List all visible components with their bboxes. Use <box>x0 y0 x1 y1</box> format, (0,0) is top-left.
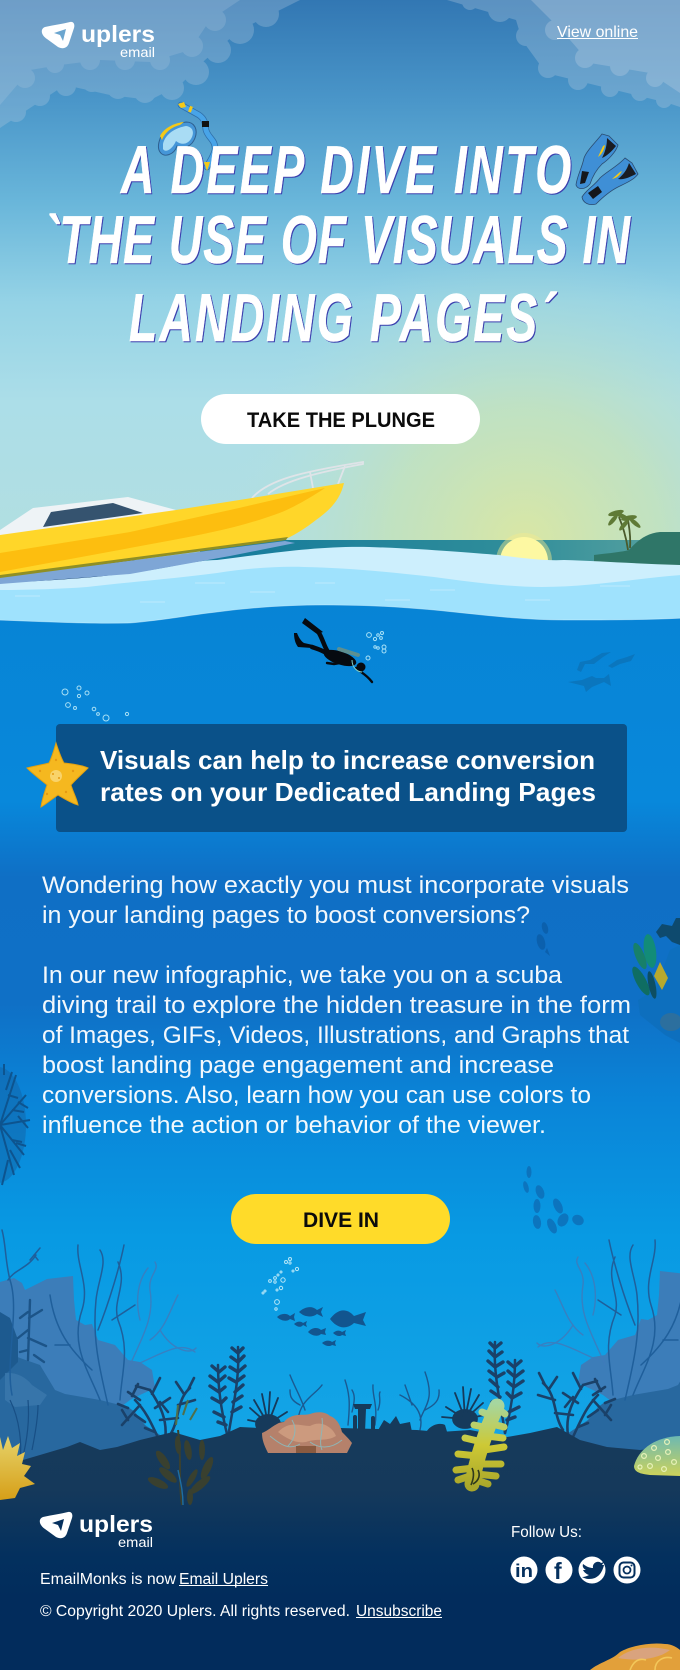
footer: emailmonks line <box>40 1571 268 1588</box>
title: `THE USE OF VISUALS IN <box>43 202 631 278</box>
icon: facebook <box>546 1556 572 1584</box>
title: A DEEP DIVE INTO <box>119 132 571 208</box>
yellow coral left <box>0 1436 35 1500</box>
icon: linkedin <box>510 1556 538 1584</box>
footer: copyright line: Unsubscribe <box>356 1603 442 1620</box>
sky background <box>0 0 680 560</box>
footer: emailmonks line: EmailMonks is now <box>40 1571 177 1588</box>
icon: facebook: f <box>554 1558 562 1584</box>
island with palm trees <box>594 509 680 565</box>
clouds: top right <box>447 0 680 108</box>
sun glow <box>200 240 680 560</box>
bubbles left of callout <box>62 686 129 742</box>
body text: boost landing page engagement and increase <box>42 1052 554 1079</box>
button: dive in: DIVE IN <box>303 1209 379 1232</box>
title: LANDING PAGES´ <box>129 280 558 356</box>
central dark coral shapes <box>353 1404 448 1435</box>
icon: snorkel mask <box>158 102 215 171</box>
icon: linkedin: in <box>515 1561 533 1581</box>
logo: uplers email: uplers <box>81 21 155 47</box>
icon: diving fins <box>576 134 638 205</box>
bubbles above fish <box>262 1258 299 1310</box>
bubbles near diver <box>366 632 386 660</box>
body text <box>42 872 631 1139</box>
teal brain coral <box>634 1436 680 1476</box>
callout panel: Visuals can help to increase conversion <box>100 745 595 775</box>
body text: conversions. Also, learn how you can use colors to <box>42 1082 591 1109</box>
clouds: top left <box>0 0 300 128</box>
yellow-green kelp <box>456 1406 505 1485</box>
seabed ground <box>0 1425 680 1670</box>
olive kelp <box>146 1400 216 1505</box>
body text: of Images, GIFs, Videos, Illustrations, and Graphs that <box>42 1022 629 1049</box>
callout panel: rates on your Dedicated Landing Pages <box>100 777 596 807</box>
logo: uplers email: email <box>120 45 155 60</box>
clouds: top right inner <box>531 0 680 93</box>
footer logo: email <box>118 1535 153 1550</box>
bush silhouette <box>248 1392 291 1433</box>
fish school right <box>522 1166 586 1235</box>
icon: twitter <box>578 1556 606 1584</box>
sun <box>496 533 552 589</box>
body text: Wondering how exactly you must incorporate visuals <box>42 872 629 899</box>
button: take the plunge: TAKE THE PLUNGE <box>247 409 435 432</box>
view online link: View online <box>557 24 638 41</box>
brown coral <box>262 1412 352 1453</box>
underwater body <box>0 605 680 1670</box>
body text: in your landing pages to boost conversions? <box>42 902 530 929</box>
callout panel <box>56 724 627 832</box>
distant sea band <box>200 540 680 580</box>
button: take the plunge <box>201 394 480 444</box>
tadpole fish <box>535 921 550 956</box>
wave: upper light <box>0 547 680 640</box>
clouds: top left inner <box>0 0 240 105</box>
footer logo <box>40 1511 153 1550</box>
follow us label: Follow Us: <box>511 1524 582 1541</box>
boat <box>0 462 363 584</box>
wave: lower mid blue <box>0 567 680 640</box>
body text: In our new infographic, we take you on a scuba <box>42 962 563 989</box>
body text: diving trail to explore the hidden treasure in the form <box>42 992 631 1019</box>
left-edge fan coral <box>0 1064 30 1185</box>
body text: influence the action or behavior of the viewer. <box>42 1112 546 1139</box>
right-edge plants <box>629 918 680 1043</box>
sharks in distance <box>568 652 635 692</box>
logo: uplers email <box>42 21 155 60</box>
bottom-right coral <box>590 1643 680 1670</box>
button: dive in <box>231 1194 450 1244</box>
icon: starfish <box>27 743 88 807</box>
fish school center <box>277 1307 366 1346</box>
reef scenery: right side mirrored <box>442 1225 680 1475</box>
reef scenery: left side <box>0 1230 291 1480</box>
footer: copyright line: © Copyright 2020 Uplers. All rights reserved. <box>40 1603 350 1620</box>
central sea weeds <box>290 1372 439 1430</box>
footer: emailmonks line: Email Uplers <box>179 1571 268 1588</box>
footer logo: uplers <box>79 1511 153 1537</box>
title <box>43 132 631 356</box>
diver <box>294 618 372 682</box>
icon: instagram <box>614 1556 640 1584</box>
